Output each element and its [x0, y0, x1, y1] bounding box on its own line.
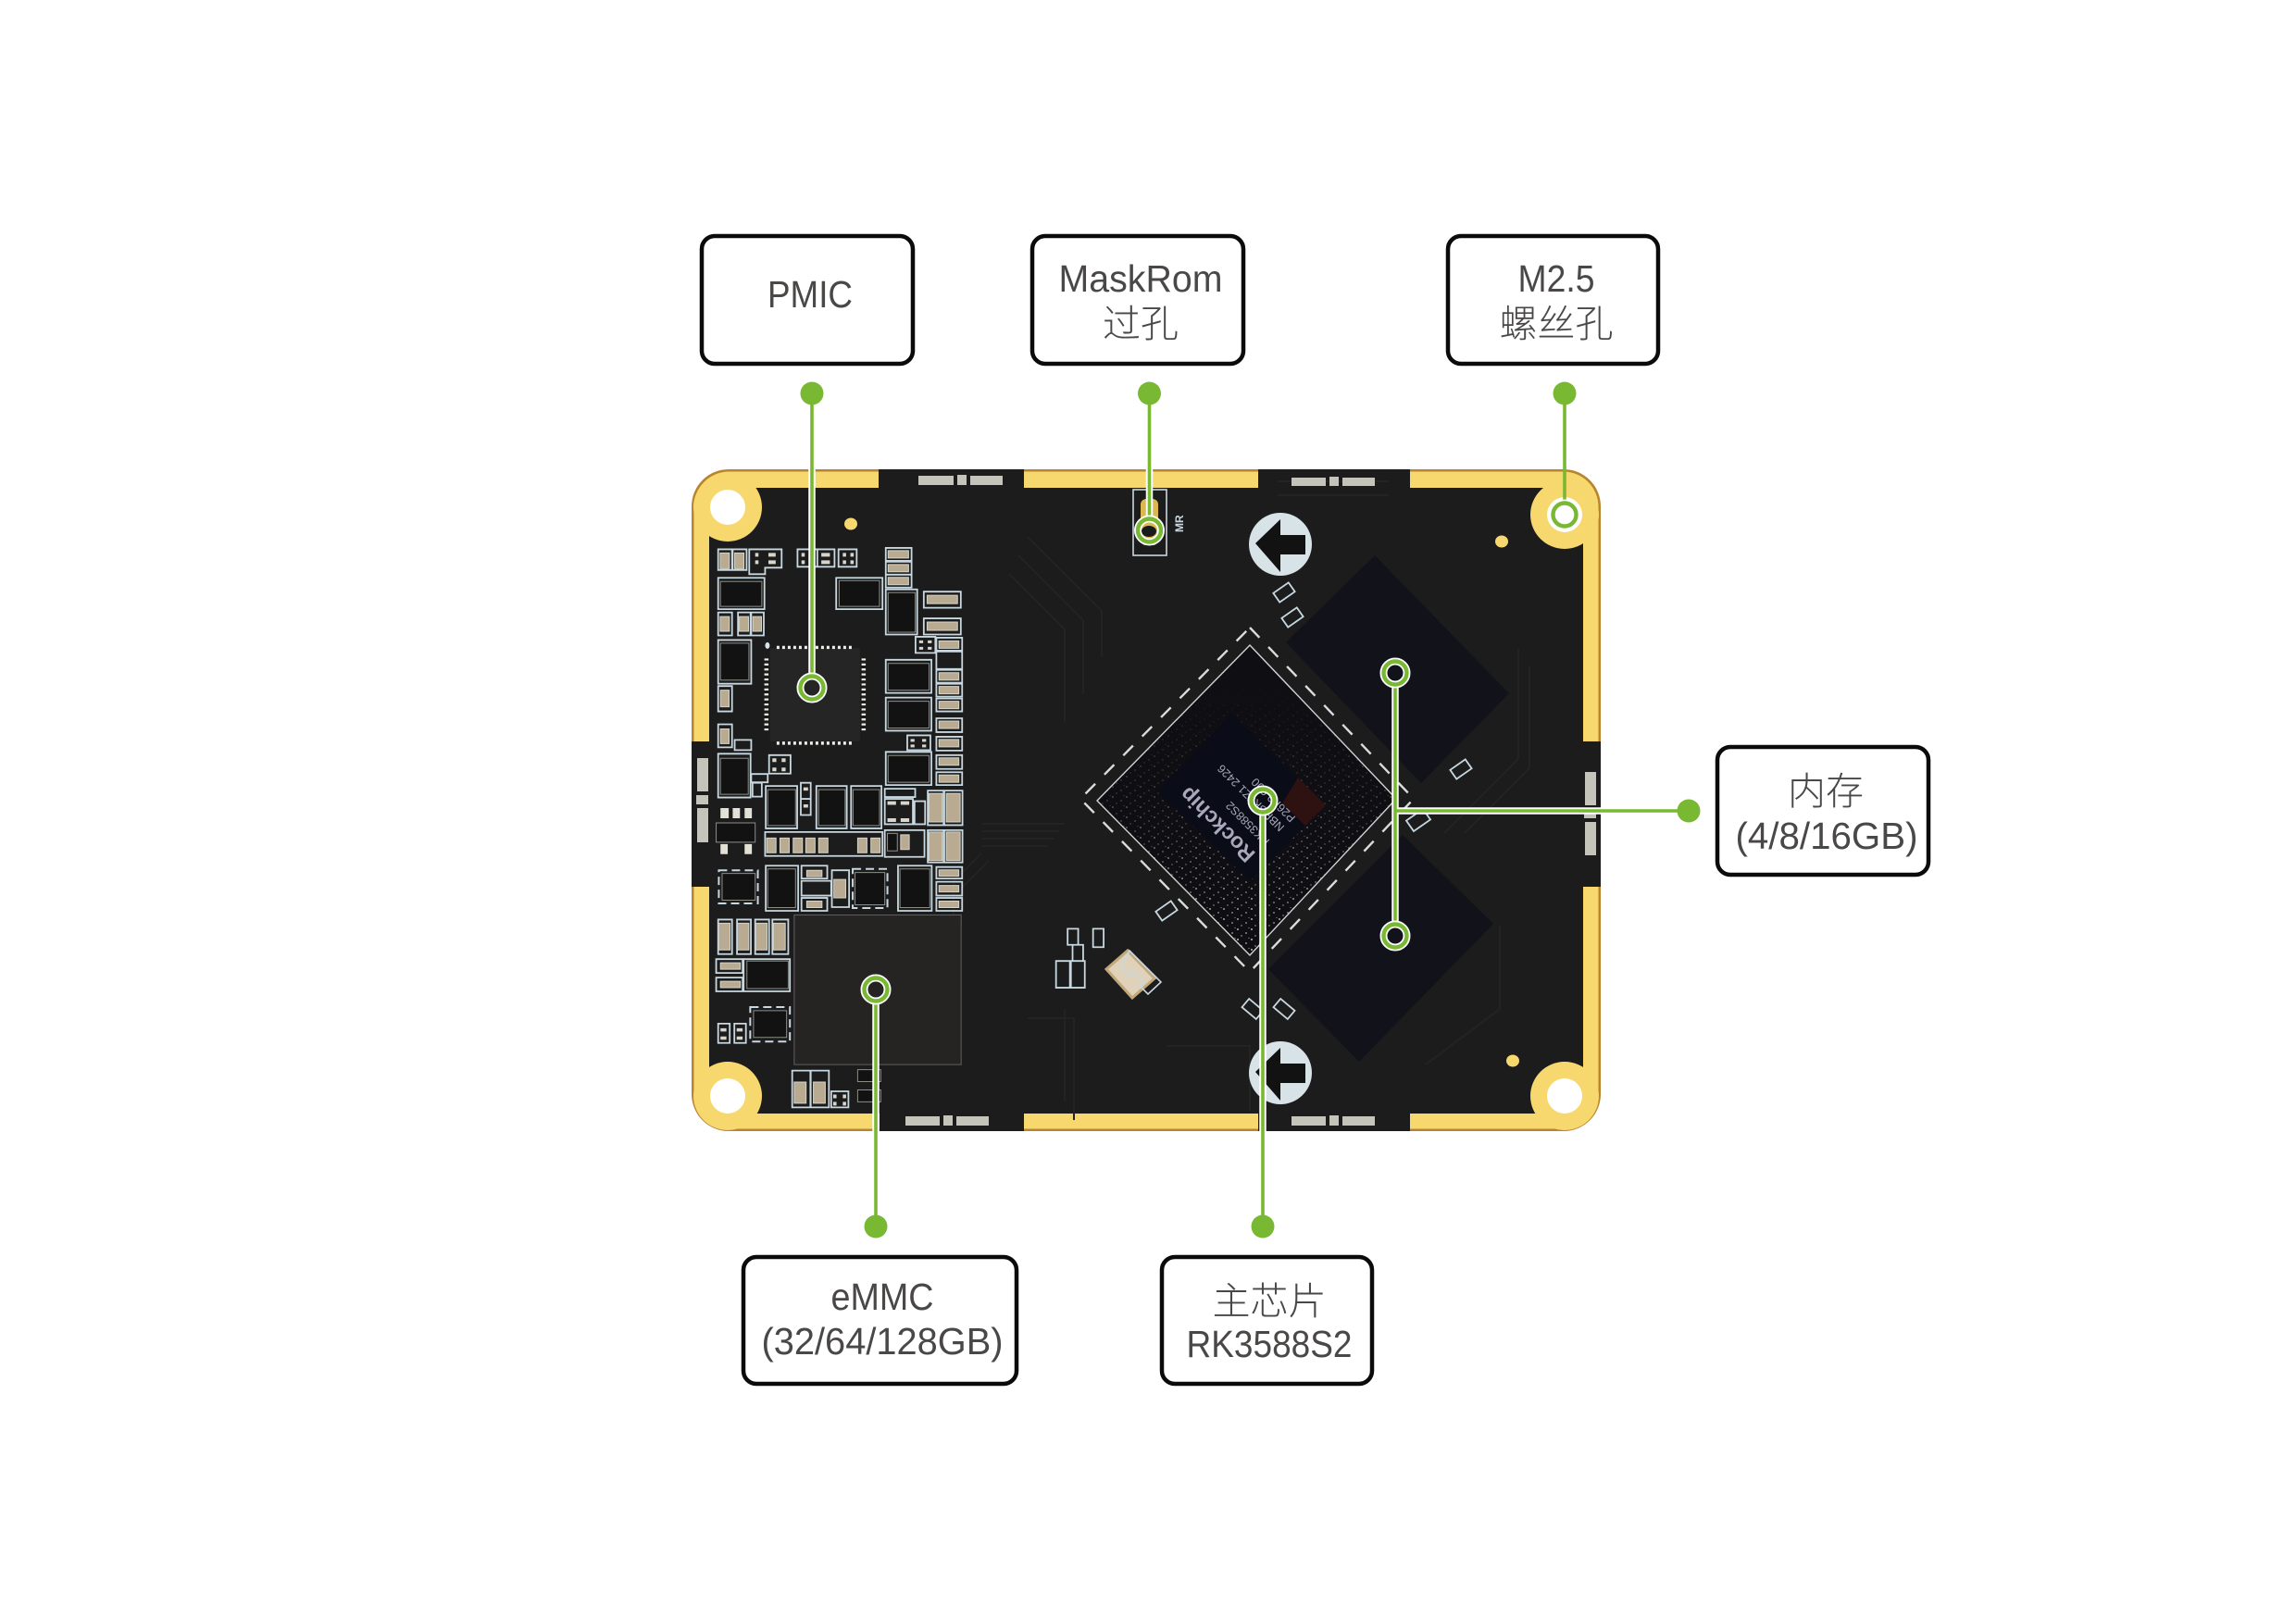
callout: MaskRom leader: [1138, 381, 1161, 542]
label: main chip: 主芯片: [1213, 1280, 1326, 1323]
package: [1097, 645, 1396, 955]
label: PMIC: PMIC: [767, 273, 853, 316]
memory chip bottom: [1268, 835, 1493, 1062]
callout: eMMC leader: [865, 977, 887, 1238]
main processor RK3588S2: [1080, 628, 1414, 972]
chip marking: Rockchip: [1175, 782, 1260, 867]
label: MaskRom via: MaskRom: [1059, 257, 1222, 300]
tan capacitor pads: [718, 551, 960, 1103]
fiducial pads: [844, 518, 1519, 1066]
label: MaskRom via: [1032, 236, 1243, 364]
label: MaskRom via: 过孔: [1103, 303, 1179, 345]
MR silkscreen text: MR: [1173, 515, 1186, 532]
label: M2.5 screw hole: M2.5: [1518, 257, 1594, 300]
eMMC package: [794, 915, 961, 1064]
callout: PMIC leader: [800, 381, 824, 700]
chip marking: NBFGK7Z1 2426: [1215, 762, 1287, 834]
label: main chip: RK3588S2: [1187, 1323, 1352, 1365]
left component area: [717, 548, 1104, 1107]
label: memory: 内存: [1788, 770, 1864, 813]
small diagonal passives: [1155, 582, 1472, 1019]
MaskRom test point: [1133, 490, 1186, 555]
callout: M2.5 leader: [1554, 381, 1576, 526]
label: M2.5 screw hole: [1448, 236, 1658, 364]
silkscreen component outlines: [717, 548, 1104, 1107]
label: M2.5 screw hole: 螺丝孔: [1500, 303, 1613, 345]
faint board traces: [954, 481, 1529, 1120]
chip marking: RK3588S2: [1223, 799, 1272, 848]
direction arrow top: [1249, 513, 1312, 576]
memory chip top: [1286, 555, 1509, 783]
PMIC package: [765, 642, 864, 743]
dark IC bodies: [717, 580, 930, 1101]
label: main chip: [1162, 1257, 1372, 1384]
corner mounting holes: [693, 473, 1599, 1130]
die speckles: [1102, 702, 1391, 951]
crystal oscillator: [1106, 951, 1161, 998]
label: memory: [1717, 747, 1928, 875]
direction arrow bottom: [1249, 1041, 1312, 1104]
label: eMMC: (32/64/128GB): [761, 1320, 1004, 1363]
edge connectors: [696, 475, 1596, 1126]
circuit board: [692, 469, 1601, 1131]
small white solder pads: [720, 553, 931, 1105]
callout: memory leader: [1383, 661, 1700, 948]
board base and gold edge: [692, 469, 1601, 1131]
SOT pads: [720, 808, 752, 854]
label: eMMC: eMMC: [831, 1276, 933, 1318]
label: PMIC: [702, 236, 913, 364]
callout: main chip leader: [1252, 789, 1274, 1238]
label: eMMC: [743, 1257, 1017, 1384]
chip marking: P26F0 000: [1249, 776, 1298, 825]
label: memory: (4/8/16GB): [1735, 815, 1918, 857]
chip marking: [1175, 762, 1298, 867]
die: [1157, 714, 1326, 881]
dashed keepout outline: [1080, 628, 1414, 972]
dashed footprints: [718, 869, 888, 1041]
die red corner: [1282, 778, 1326, 826]
